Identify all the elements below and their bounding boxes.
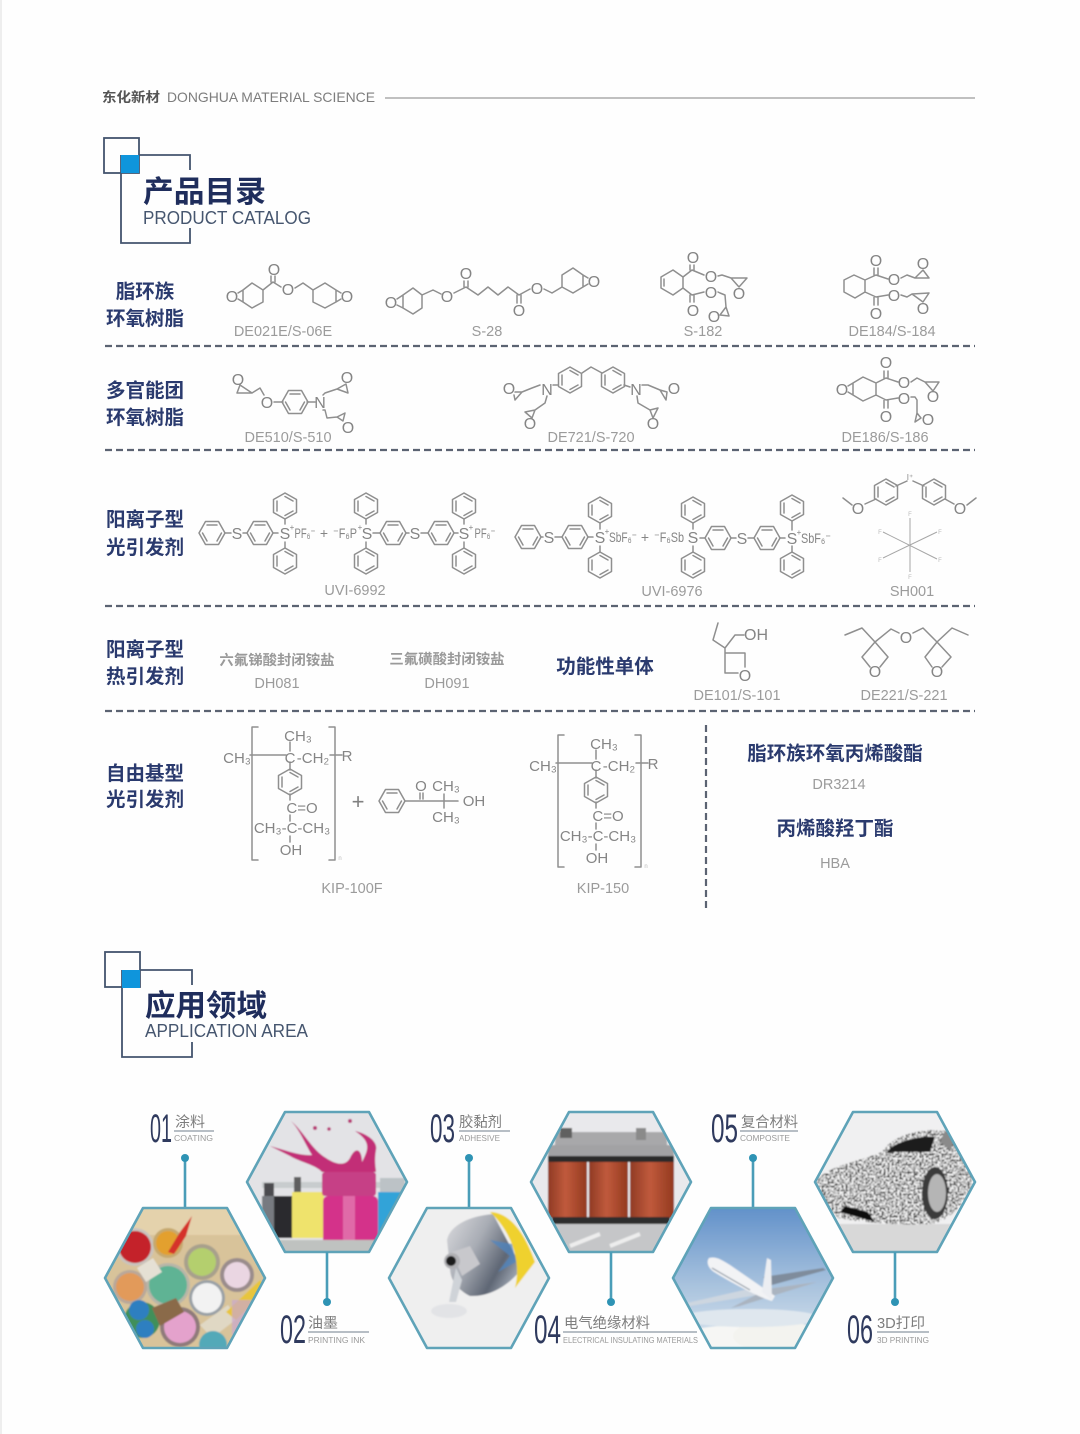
product: HBA xyxy=(776,818,894,872)
molecule: UVI-6976: ⁻F₆Sb xyxy=(654,529,684,545)
divider xyxy=(105,605,975,607)
molecule: KIP-150: n xyxy=(644,864,648,870)
molecule: DE721/S-720: DE721/S-720 xyxy=(547,430,635,446)
molecule: DE721/S-720: N xyxy=(541,382,553,399)
row label: alicyclic epoxy resin xyxy=(106,280,184,330)
molecule: S-28: O xyxy=(385,295,397,312)
molecule: DE186/S-186: DE186/S-186 xyxy=(841,430,929,446)
application 02: printing ink xyxy=(245,1110,410,1352)
molecule: DE221/S-221 xyxy=(845,628,968,704)
molecule: DE184/S-184: O xyxy=(917,301,929,318)
molecule: DE184/S-184: O xyxy=(917,256,929,273)
row label: cationic thermal initiator: 热引发剂 xyxy=(106,665,184,688)
molecule: DE221/S-221: DE221/S-221 xyxy=(860,688,948,704)
molecule: DE510/S-510: O xyxy=(232,372,244,389)
molecule: DE021E/S-06E: O xyxy=(282,282,294,299)
molecule: UVI-6976: + xyxy=(797,528,802,537)
molecule: KIP-150: C xyxy=(591,758,602,775)
molecule: S-182 xyxy=(661,250,747,340)
product: DH081: DH081 xyxy=(254,676,300,692)
heading: product catalog xyxy=(104,138,311,243)
molecule: KIP-150 xyxy=(529,735,659,897)
molecule: UVI-6976 xyxy=(515,495,831,600)
molecule: S-28: O xyxy=(531,281,543,298)
molecule: KIP-100F: CH₃ xyxy=(432,809,460,826)
application 02: printing ink: PRINTING INK xyxy=(308,1336,366,1345)
molecule: KIP-100F: OH xyxy=(463,793,485,810)
molecule: UVI-6976: + xyxy=(605,527,610,536)
molecule: S-28: O xyxy=(513,303,525,320)
product: HBA: 丙烯酸羟丁酯 xyxy=(776,818,894,840)
molecule: DE021E/S-06E: O xyxy=(341,289,353,306)
molecule: S-28: S-28 xyxy=(472,324,502,340)
heading: application area xyxy=(105,952,308,1057)
molecule: DE184/S-184: O xyxy=(888,272,900,289)
molecule: DE510/S-510 xyxy=(232,370,354,446)
heading: application area: APPLICATION AREA xyxy=(145,1021,308,1041)
molecule: KIP-100F: O xyxy=(415,778,427,795)
molecule: SH001: SH001 xyxy=(890,584,934,600)
application 04: electrical insulating materials: 电气绝缘材料 xyxy=(564,1315,650,1332)
molecule: UVI-6992: + xyxy=(320,525,328,541)
molecule: SH001: F xyxy=(878,530,882,536)
application 04: electrical insulating materials xyxy=(530,1110,698,1352)
molecule: UVI-6976: SbF₆⁻ xyxy=(801,530,831,546)
application 02: printing ink: 02 xyxy=(280,1308,306,1352)
molecule: UVI-6992: ⁻F₆P xyxy=(333,525,357,541)
molecule: UVI-6992 xyxy=(199,493,496,599)
molecule: DE021E/S-06E xyxy=(226,262,353,340)
molecule: DE721/S-720: O xyxy=(647,416,659,433)
molecule: DE186/S-186: O xyxy=(898,375,910,392)
molecule: S-28: O xyxy=(460,266,472,283)
molecule: S-28: O xyxy=(588,274,600,291)
molecule: KIP-100F: -CH₂ xyxy=(297,750,329,767)
product: DH081 xyxy=(219,651,335,692)
molecule: DE186/S-186: O xyxy=(898,391,910,408)
molecule: KIP-150: C=O xyxy=(592,808,624,825)
molecule: DE721/S-720 xyxy=(503,367,680,446)
application 01: coating xyxy=(104,1114,266,1350)
molecule: DE184/S-184: O xyxy=(870,253,882,270)
application 05: composite xyxy=(670,1107,840,1354)
molecule: DE021E/S-06E: O xyxy=(268,262,280,279)
molecule: DE221/S-221: O xyxy=(869,664,881,681)
row label: free radical photoinitiator: 自由基型 xyxy=(106,762,184,785)
application 04: electrical insulating materials: ELECTRICAL INSULATING MATERIALS xyxy=(563,1336,698,1345)
molecule: DE221/S-221: O xyxy=(931,664,943,681)
molecule: KIP-100F: CH₃-C-CH₃ xyxy=(254,820,330,837)
product: DH081: 六氟锑酸封闭铵盐 xyxy=(219,651,335,669)
heading: product catalog: 产品目录 xyxy=(143,176,266,209)
divider xyxy=(105,449,975,451)
application 03: adhesive: 胶黏剂 xyxy=(459,1114,502,1131)
molecule: DE721/S-720: O xyxy=(503,381,515,398)
molecule: DE184/S-184 xyxy=(844,253,936,340)
molecule: KIP-150: CH₃-C-CH₃ xyxy=(560,828,636,845)
molecule: KIP-150: -CH₂ xyxy=(603,758,635,775)
molecule: DE721/S-720: O xyxy=(668,381,680,398)
product: HBA: HBA xyxy=(820,856,850,872)
molecule: DE101/S-101 xyxy=(693,623,781,704)
application 05: composite: 05 xyxy=(711,1107,738,1151)
molecule: DE186/S-186: O xyxy=(836,382,848,399)
product: DH091: DH091 xyxy=(424,676,470,692)
molecule: KIP-150: KIP-150 xyxy=(577,881,629,897)
molecule: SH001: O xyxy=(852,501,864,518)
molecule: SH001: F xyxy=(908,575,912,581)
molecule: KIP-100F: R xyxy=(342,748,353,765)
row label: multifunctional epoxy resin xyxy=(106,379,184,429)
product: DR3214: 脂环族环氧丙烯酸酯 xyxy=(747,742,923,765)
molecule: UVI-6976: S xyxy=(595,530,605,547)
molecule: DE510/S-510: N xyxy=(314,395,326,412)
molecule: DE021E/S-06E: O xyxy=(226,289,238,306)
molecule: SH001: F xyxy=(908,512,912,518)
row label: multifunctional epoxy resin: 多官能团 xyxy=(106,379,184,402)
row label: free radical photoinitiator: 光引发剂 xyxy=(106,788,184,811)
molecule: S-182: S-182 xyxy=(684,324,722,340)
molecule: DE186/S-186: O xyxy=(880,409,892,426)
row label: alicyclic epoxy resin: 脂环族 xyxy=(116,280,175,303)
product: DR3214 xyxy=(747,742,923,793)
row label: cationic photoinitiator: 阳离子型 xyxy=(106,508,184,531)
molecule: S-182: O xyxy=(705,269,717,286)
molecule: UVI-6976: + xyxy=(641,529,649,545)
application 04: electrical insulating materials: 04 xyxy=(534,1308,561,1352)
molecule: DE186/S-186: O xyxy=(922,412,934,429)
molecule: UVI-6992: UVI-6992 xyxy=(324,583,386,599)
molecule: KIP-150: CH₃ xyxy=(590,736,618,753)
molecule: UVI-6992: S xyxy=(232,526,242,543)
divider xyxy=(105,710,975,712)
molecule: S-182: O xyxy=(687,303,699,320)
row label: alicyclic epoxy resin: 环氧树脂 xyxy=(106,308,184,330)
molecule: UVI-6976: S xyxy=(737,531,747,548)
molecule: KIP-100F: CH₃ xyxy=(284,728,312,745)
molecule: SH001: F xyxy=(938,558,942,564)
molecule: KIP-150: CH₃ xyxy=(529,758,557,775)
molecule: UVI-6992: S xyxy=(362,526,372,543)
product: DH091 xyxy=(389,650,505,692)
molecule: S-28: O xyxy=(441,289,453,306)
molecule: UVI-6976: SbF₆⁻ xyxy=(609,529,637,545)
row label: cationic thermal initiator xyxy=(106,638,184,688)
molecule: KIP-150: OH xyxy=(586,850,608,867)
application 06: 3D printing xyxy=(812,1110,978,1352)
heading: functional monomer: 功能性单体 xyxy=(556,656,654,678)
application 06: 3D printing: 06 xyxy=(847,1308,873,1352)
molecule: UVI-6992: S xyxy=(459,526,469,543)
heading: product catalog: PRODUCT CATALOG xyxy=(143,208,311,228)
molecule: KIP-100F: OH xyxy=(280,842,302,859)
molecule: S-182: O xyxy=(687,250,699,267)
molecule: DE101/S-101: O xyxy=(739,668,751,685)
panel: application area xyxy=(100,952,978,1359)
molecule: DE101/S-101: OH xyxy=(744,627,768,644)
molecule: KIP-100F: KIP-100F xyxy=(321,881,383,897)
molecule: DE101/S-101: DE101/S-101 xyxy=(693,688,781,704)
molecule: UVI-6976: UVI-6976 xyxy=(641,584,703,600)
application 06: 3D printing: 3D打印 xyxy=(877,1315,925,1332)
molecule: DE184/S-184: O xyxy=(870,306,882,323)
molecule: KIP-100F: CH₃ xyxy=(432,778,460,795)
application 06: 3D printing: 3D PRINTING xyxy=(877,1336,929,1345)
application 03: adhesive: ADHESIVE xyxy=(459,1134,500,1143)
molecule: SH001: F xyxy=(938,530,942,536)
molecule: DE510/S-510: O xyxy=(342,420,354,437)
molecule: UVI-6992: + xyxy=(469,523,474,532)
divider xyxy=(105,345,975,347)
molecule: DE186/S-186: O xyxy=(880,355,892,372)
molecule: KIP-100F: C xyxy=(285,750,296,767)
row label: cationic photoinitiator xyxy=(106,508,184,559)
molecule: SH001: O xyxy=(954,501,966,518)
molecule: KIP-100F xyxy=(223,727,485,897)
application 01: coating: 涂料 xyxy=(175,1114,205,1131)
row label: cationic photoinitiator: 光引发剂 xyxy=(106,536,184,559)
molecule: KIP-150: R xyxy=(648,756,659,773)
molecule: KIP-100F: CH₃ xyxy=(223,750,251,767)
molecule: UVI-6976: S xyxy=(688,530,698,547)
application 05: composite: 复合材料 xyxy=(741,1113,798,1131)
molecule: S-182: O xyxy=(733,286,745,303)
molecule: S-28 xyxy=(385,266,600,340)
page header xyxy=(102,89,975,105)
molecule: UVI-6976: S xyxy=(544,530,554,547)
molecule: DE510/S-510: O xyxy=(341,370,353,387)
molecule: KIP-100F: + xyxy=(352,789,364,814)
row label: free radical photoinitiator xyxy=(106,762,184,811)
molecule: DE186/S-186: O xyxy=(927,389,939,406)
row label: multifunctional epoxy resin: 环氧树脂 xyxy=(106,407,184,429)
application 03: adhesive xyxy=(385,1107,555,1353)
molecule: UVI-6992: + xyxy=(358,523,363,532)
panel: product catalog xyxy=(104,138,976,912)
row label: cationic thermal initiator: 阳离子型 xyxy=(106,638,184,661)
molecule: UVI-6992: S xyxy=(410,526,420,543)
molecule: UVI-6976: S xyxy=(787,531,797,548)
molecule: S-182: O xyxy=(705,285,717,302)
divider xyxy=(705,725,707,912)
application 01: coating: 01 xyxy=(150,1107,172,1151)
molecule: UVI-6992: S xyxy=(280,526,290,543)
molecule: KIP-100F: C=O xyxy=(286,800,318,817)
molecule: UVI-6992: PF₆⁻ xyxy=(294,525,316,541)
product: DH091: 三氟磺酸封闭铵盐 xyxy=(389,650,505,668)
molecule: DE021E/S-06E: DE021E/S-06E xyxy=(234,324,332,340)
molecule: DE184/S-184: DE184/S-184 xyxy=(848,324,936,340)
molecule: SH001: I⁺ xyxy=(907,473,913,482)
molecule: DE721/S-720: N xyxy=(630,382,642,399)
molecule: UVI-6992: + xyxy=(290,523,295,532)
page header: 东化新材 xyxy=(102,89,161,105)
application 03: adhesive: 03 xyxy=(430,1107,455,1151)
molecule: DE510/S-510: DE510/S-510 xyxy=(244,430,332,446)
molecule: SH001 xyxy=(843,473,976,600)
application 02: printing ink: 油墨 xyxy=(308,1315,338,1332)
molecule: SH001: F xyxy=(878,558,882,564)
molecule: DE221/S-221: O xyxy=(900,630,912,647)
molecule: UVI-6992: PF₆⁻ xyxy=(474,525,496,541)
molecule: DE510/S-510: O xyxy=(261,395,273,412)
page header: DONGHUA MATERIAL SCIENCE xyxy=(167,89,375,105)
molecule: DE721/S-720: O xyxy=(524,416,536,433)
product: DR3214: DR3214 xyxy=(812,777,866,793)
heading: application area: 应用领域 xyxy=(145,990,267,1023)
molecule: KIP-100F: n xyxy=(338,856,342,862)
application 05: composite: COMPOSITE xyxy=(740,1134,790,1143)
molecule: DE184/S-184: O xyxy=(888,288,900,305)
molecule: DE186/S-186 xyxy=(836,355,939,446)
application 01: coating: COATING xyxy=(174,1134,213,1143)
molecule: S-182: O xyxy=(708,309,720,326)
